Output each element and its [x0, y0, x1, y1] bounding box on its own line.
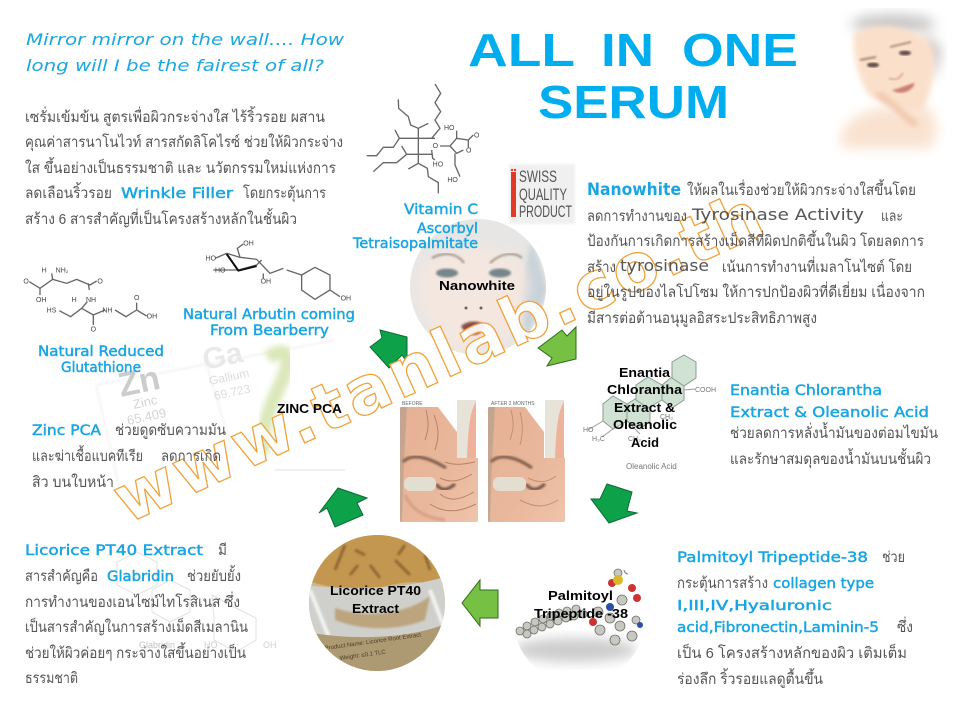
text block: nanowhite description: และ: [881, 208, 903, 225]
text block: serum introduction: โดยกระตุ้นการ: [243, 184, 326, 203]
text block: palmitoyl tripeptide: [677, 549, 913, 688]
label: vitamin C ascorbyl tetraisopalmitate: [352, 202, 478, 252]
molecule: oleanolic acid: [583, 355, 716, 471]
molecule: arbutin: OH: [261, 278, 271, 285]
molecule: glutathione: [23, 267, 157, 333]
badge: swiss quality product: [509, 164, 575, 224]
molecule: oleanolic acid: H₃C: [592, 436, 605, 443]
text block: nanowhite description: ป้องกันการเกิดการสร้างเม็ดสีที่ผิดปกติขึ้นในผิว โดยลดการ: [587, 230, 924, 250]
text block: nanowhite description: ให้ผลในเรื่องช่วยให้ผิวกระจ่างใสขึ้นโดย: [687, 179, 916, 199]
label: natural reduced glutathione: Natural Reduced: [38, 344, 164, 360]
label: zinc pca: ZINC PCA: [277, 401, 343, 416]
molecule: glutathione: HS: [47, 308, 57, 315]
text block: nanowhite description: Nanowhite: [587, 180, 681, 200]
molecule: oleanolic acid: Oleanolic Acid: [626, 462, 677, 471]
arrow: toward zinc: [319, 488, 367, 527]
text block: enantia chlorantha: [730, 383, 938, 469]
text block: enantia chlorantha: Enantia Chlorantha: [730, 383, 882, 399]
text block: palmitoyl tripeptide: ซึ่ง: [897, 616, 913, 636]
text block: licorice extract: ธรรมชาติ: [25, 670, 78, 687]
after panel: [488, 400, 565, 522]
zinc periodic table background image: Gallium: [208, 366, 250, 388]
photo circle: nanowhite face: [408, 217, 548, 357]
zinc periodic table background image: 69.723: [213, 382, 252, 403]
before panel: [400, 400, 478, 522]
label: enantia chlorantha: Extract &: [614, 400, 675, 415]
title: ONE: [682, 24, 798, 76]
zinc periodic table background image: [96, 336, 345, 490]
text block: nanowhite description: Tyrosinase Activity: [691, 205, 864, 224]
before and after photos: [400, 400, 565, 522]
text block: licorice extract: ช่วยยับยั้ง: [187, 565, 241, 585]
badge: swiss quality product: SWISS: [519, 167, 557, 186]
label: palmitoyl tripeptide: Palmitoyl: [548, 588, 613, 603]
label: vitamin C ascorbyl tetraisopalmitate: Vitamin C: [404, 202, 478, 218]
text block: enantia chlorantha: Extract & Oleanolic Acid: [730, 405, 929, 421]
text block: nanowhite description: สร้าง: [587, 259, 616, 276]
molecule: vitamin C ascorbyl tetraisopalmitate: HO: [444, 125, 455, 132]
molecule: glutathione: NH: [86, 297, 96, 304]
molecule: vitamin C ascorbyl tetraisopalmitate: HO: [433, 162, 444, 169]
arrow: toward enantia: [538, 327, 576, 366]
text block: palmitoyl tripeptide: เป็น 6 โครงสร้างหลักของผิว เติมเต็ม: [677, 643, 907, 662]
zinc periodic table background image: Ga: [200, 336, 246, 377]
molecule: oleanolic acid: HO: [583, 427, 594, 434]
heading: mirror mirror tagline: Mirror mirror on the wall.... How: [26, 30, 345, 49]
molecule: glutathione: H: [42, 267, 47, 274]
woman portrait photo: [840, 14, 942, 148]
label: natural arbutin: Natural Arbutin coming: [183, 307, 355, 323]
text block: serum introduction: เซรั่มเข้มข้น สูตรเพื่อผิวกระจ่างใส ไร้ริ้วรอย ผสาน: [25, 106, 325, 126]
text block: zinc pca: Zinc PCA: [32, 423, 101, 439]
text block: licorice extract: [25, 542, 248, 687]
zinc periodic table background image: Zn: [115, 359, 163, 405]
molecule: arbutin: OH: [341, 296, 351, 303]
label: enantia chlorantha: Chlorantha: [607, 382, 683, 397]
text block: serum introduction: Wrinkle Filler: [121, 186, 233, 202]
heading: mirror mirror tagline: [26, 30, 345, 75]
text block: serum introduction: ใส ขึ้นอย่างเป็นธรรมชาติ และ นวัตกรรมใหม่แห่งการ: [25, 157, 336, 177]
molecule: vitamin C ascorbyl tetraisopalmitate: [367, 84, 480, 193]
text block: palmitoyl tripeptide: collagen type: [773, 576, 874, 592]
molecule: glutathione: H: [72, 297, 77, 304]
label: natural arbutin: From Bearberry: [210, 323, 329, 339]
molecule: vitamin C ascorbyl tetraisopalmitate: O: [474, 132, 480, 139]
molecule: glutathione: O: [97, 278, 103, 285]
heading: mirror mirror tagline: long will I be the fairest of all?: [26, 56, 325, 75]
badge: swiss quality product: PRODUCT: [519, 202, 572, 221]
title: IN: [601, 24, 654, 76]
text block: licorice extract: เป็นสารสำคัญในการสร้างเม็ดสีเมลานิน: [25, 617, 248, 636]
photo circle: licorice powder: Product Name: Licorice Root Extract: [324, 632, 422, 652]
watermark: www.tanlab.co.th: www.tanlab.co.th: [102, 177, 774, 539]
molecule: vitamin C ascorbyl tetraisopalmitate: O: [433, 143, 439, 150]
text block: zinc pca: [32, 422, 226, 491]
title: [468, 24, 798, 128]
photo circle: palmitoyl tripeptide molecule: [513, 566, 643, 662]
arrow: up toward nanowhite: [370, 330, 407, 368]
molecule: glutathione: O: [134, 295, 140, 302]
text block: serum introduction: [25, 106, 343, 228]
text block: zinc pca: ช่วยดูดซับความมัน: [115, 422, 226, 439]
molecule: glutathione: O: [91, 326, 97, 333]
label: vitamin C ascorbyl tetraisopalmitate: Ascorbyl: [417, 221, 478, 237]
text block: nanowhite description: เน้นการทำงานที่เมลาโนไซต์ โดย: [722, 256, 912, 276]
text block: serum introduction: สร้าง 6 สารสำคัญที่เป็นโครงสร้างหลักในชั้นผิว: [25, 208, 297, 228]
text block: licorice extract: Licorice PT40 Extract: [25, 543, 204, 559]
molecule: oleanolic acid: COOH: [695, 387, 716, 394]
text block: licorice extract: สารสำคัญคือ: [25, 568, 98, 585]
text block: licorice extract: มี: [218, 542, 227, 559]
text block: licorice extract: Glabridin: [107, 569, 174, 585]
text block: zinc pca: สิว บนใบหน้า: [32, 473, 114, 491]
text block: palmitoyl tripeptide: Palmitoyl Tripeptide-38: [677, 550, 868, 566]
text block: enantia chlorantha: และรักษาสมดุลของน้ำมันบนชั้นผิว: [730, 448, 931, 469]
faint Glabridin molecule background: [117, 552, 276, 652]
badge: swiss quality product: QUALITY: [519, 185, 567, 204]
label: licorice pt40 extract: Licorice PT40: [330, 583, 421, 598]
text block: nanowhite description: [587, 179, 925, 328]
label: palmitoyl tripeptide: [534, 588, 628, 621]
text block: palmitoyl tripeptide: ช่วย: [882, 549, 905, 566]
molecule: arbutin: HO: [215, 267, 226, 274]
molecule: glutathione: OH: [36, 297, 46, 304]
molecule: arbutin: HO: [206, 256, 217, 263]
text block: licorice extract: การทำงานของเอนไซม์ไทโรสิเนส ซึ่ง: [25, 591, 240, 611]
zinc periodic table background image: 65.409: [126, 405, 168, 428]
text block: palmitoyl tripeptide: acid,Fibronectin,Laminin-5: [677, 620, 879, 636]
label: palmitoyl tripeptide: Tripeptide -38: [534, 606, 628, 621]
text block: palmitoyl tripeptide: I,III,IV,Hyaluronic: [677, 599, 832, 614]
label: licorice pt40 extract: [330, 583, 421, 616]
label: nanowhite: Nanowhite: [439, 278, 515, 293]
title: SERUM: [538, 76, 729, 128]
text block: enantia chlorantha: ช่วยลดการหลั่งน้ำมันของต่อมไขมัน: [730, 422, 938, 442]
faint Glabridin molecule background: HO: [204, 640, 218, 650]
faint Glabridin molecule background: OH: [263, 640, 276, 650]
text block: serum introduction: ลดเลือนริ้วรอย: [25, 182, 112, 202]
molecule: glutathione: OH: [147, 314, 157, 321]
label: enantia chlorantha: Oleanolic: [613, 417, 677, 432]
text block: nanowhite description: อยู่ในรูปของไลโปโซม ให้การปกป้องผิวที่ดีเยี่ยม เนื่องจาก: [587, 281, 925, 301]
text block: serum introduction: คุณค่าสารนาโนไวท์ สารสกัดลิโคไรซ์ ช่วยให้ผิวกระจ่าง: [25, 133, 343, 152]
label: natural arbutin: [183, 307, 355, 339]
arrow: toward licorice: [462, 580, 498, 626]
label: enantia chlorantha: [607, 365, 683, 450]
title: ALL: [468, 24, 575, 76]
label: natural reduced glutathione: [38, 344, 164, 376]
molecule: arbutin: [206, 240, 351, 303]
before panel: BEFORE: [402, 401, 423, 407]
faint Glabridin molecule background: Glabridin: [139, 640, 175, 650]
label: natural reduced glutathione: Glutathione: [61, 360, 141, 376]
photo circle: licorice powder: [309, 535, 445, 671]
label: enantia chlorantha: Enantia: [619, 365, 671, 380]
label: licorice pt40 extract: Extract: [352, 601, 400, 616]
arrow: toward palmitoyl: [591, 484, 637, 523]
molecule: vitamin C ascorbyl tetraisopalmitate: O: [466, 148, 472, 155]
label: enantia chlorantha: Acid: [631, 435, 659, 450]
photo circle: licorice powder: Weight: ≤0.1 TLC: [339, 649, 387, 662]
text block: palmitoyl tripeptide: ร่องลึก ริ้วรอยแลดูตื้นขึ้น: [677, 668, 823, 688]
label: vitamin C ascorbyl tetraisopalmitate: Tetraisopalmitate: [352, 236, 478, 252]
text block: zinc pca: ลดการเกิด: [161, 448, 221, 465]
text block: nanowhite description: tyrosinase: [620, 256, 709, 275]
molecule: glutathione: NH: [102, 308, 112, 315]
text block: licorice extract: ช่วยให้ผิวค่อยๆ กระจ่างใสขึ้นอย่างเป็น: [25, 642, 246, 662]
text block: palmitoyl tripeptide: กระตุ้นการสร้าง: [677, 575, 768, 593]
text block: zinc pca: และฆ่าเชื้อแบคทีเรีย: [32, 445, 143, 465]
text block: nanowhite description: ลดการทำงานของ: [587, 208, 687, 225]
molecule: vitamin C ascorbyl tetraisopalmitate: HO: [447, 177, 458, 184]
molecule: glutathione: O: [23, 278, 29, 285]
molecule: glutathione: NH₂: [56, 267, 69, 274]
molecule: oleanolic acid: CH₃: [660, 414, 673, 421]
molecule: arbutin: OH: [243, 240, 254, 247]
text block: nanowhite description: มีสารต่อต้านอนุมูลอิสระประสิทธิภาพสูง: [587, 310, 817, 328]
zinc periodic table background image: Zinc: [132, 392, 159, 412]
after panel: AFTER 2 MONTHS: [491, 401, 535, 407]
molecule: oleanolic acid: CH₃: [628, 436, 641, 443]
